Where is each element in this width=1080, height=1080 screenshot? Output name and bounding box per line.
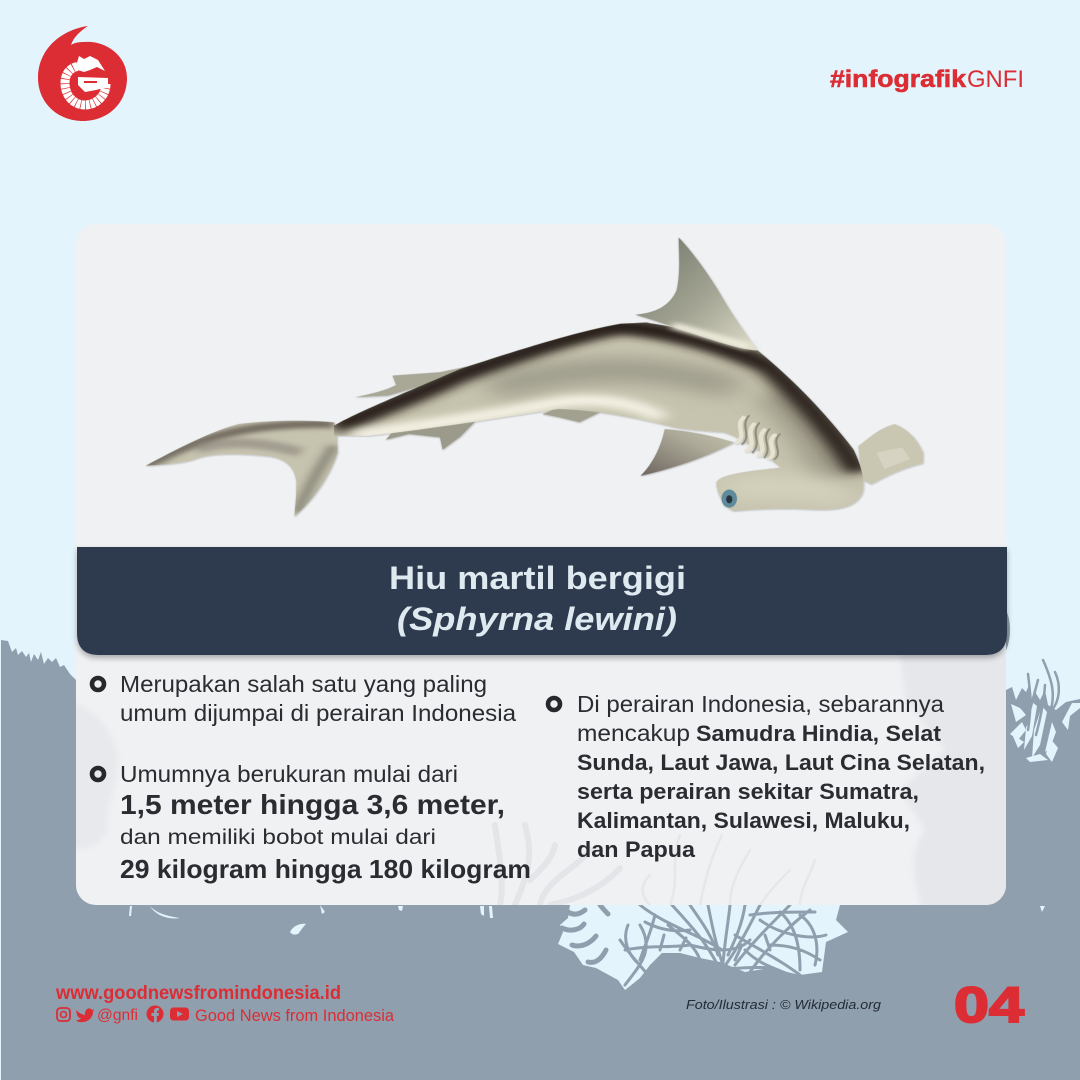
page name: Good News from Indonesia xyxy=(195,1006,395,1025)
bullet: distribution: Di perairan Indonesia, sebarannya xyxy=(577,691,944,717)
panel: shark info card xyxy=(60,224,1020,920)
coral gaps: right xyxy=(1010,702,1080,762)
icon: youtube xyxy=(170,1008,189,1020)
anal fin xyxy=(386,422,475,450)
pectoral fin xyxy=(640,429,734,476)
bullet: distribution: dan Papua xyxy=(577,837,696,862)
coral hole xyxy=(558,905,848,990)
shark body xyxy=(326,319,874,516)
bullet: size and weight: 29 kilogram hingga 180 kilogram xyxy=(120,854,531,884)
hashtag: #infografik xyxy=(830,66,967,93)
logo xyxy=(38,26,127,121)
photo credit: Foto/Ilustrasi : © Wikipedia.org xyxy=(686,997,882,1012)
shark illustration xyxy=(145,237,923,517)
small light flecks xyxy=(129,905,1045,935)
icon: facebook xyxy=(146,1006,164,1023)
bullet: common species: Merupakan salah satu yang paling xyxy=(120,671,487,697)
tail fin xyxy=(145,421,338,517)
card background xyxy=(76,224,1006,905)
gill slits xyxy=(737,416,780,459)
icon: instagram xyxy=(57,1008,70,1021)
pelvic fin xyxy=(542,407,608,422)
coral bump behind banner xyxy=(1000,604,1010,654)
bullet: distribution xyxy=(548,691,985,862)
first dorsal fin xyxy=(635,237,758,350)
hashtag: GNFI xyxy=(967,66,1024,93)
coral spikes: right xyxy=(1026,660,1059,735)
reef silhouette xyxy=(1,604,1080,1080)
bullet: distribution: Kalimantan, Sulawesi, Maluku, xyxy=(577,808,910,833)
faint coral seen through card xyxy=(492,653,1006,905)
bullet: size and weight xyxy=(92,761,531,884)
bullet: size and weight: Umumnya berukuran mulai dari xyxy=(120,761,458,787)
bullet: common species xyxy=(92,671,516,726)
title text: Hiu martil bergigi xyxy=(389,560,686,596)
icon: twitter xyxy=(76,1008,94,1022)
title text: (Sphyrna lewini) xyxy=(397,601,677,637)
hashtag xyxy=(830,66,1024,93)
bullet: size and weight: dan memiliki bobot mulai dari xyxy=(120,826,436,849)
eye xyxy=(722,490,737,508)
title banner xyxy=(77,547,1007,655)
bullet: size and weight: 1,5 meter hingga 3,6 meter, xyxy=(120,789,505,820)
bullet: distribution: mencakup xyxy=(577,720,690,746)
bullet: distribution: Samudra Hindia, Selat xyxy=(696,721,942,746)
second dorsal fin xyxy=(355,366,468,397)
coral branches xyxy=(562,905,826,985)
bullet: distribution: serta perairan sekitar Sumatra, xyxy=(577,779,919,804)
footer website: www.goodnewsfromindonesia.id xyxy=(55,983,341,1004)
bullet: distribution: Sunda, Laut Jawa, Laut Cina Selatan, xyxy=(577,750,985,775)
page number: 04 xyxy=(954,977,1024,1033)
far hammer head xyxy=(858,424,923,484)
handle: @gnfi xyxy=(97,1007,138,1024)
bullet: common species: umum dijumpai di perairan Indonesia xyxy=(120,700,516,726)
footer social xyxy=(57,1006,395,1025)
title text xyxy=(389,560,686,637)
